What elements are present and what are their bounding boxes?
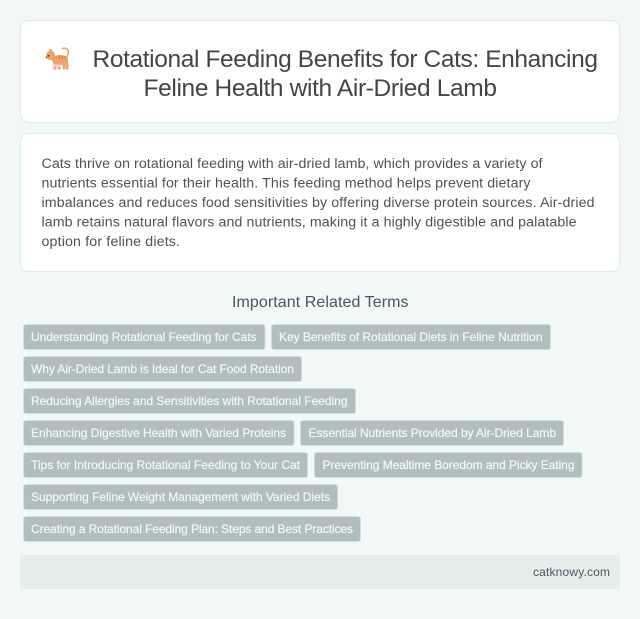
intro text: lamb retains natural flavors and nutrients, making it a highly digestible and palatable: [42, 214, 577, 230]
tag: Reducing Allergies and Sensitivities with Rotational Feeding: [31, 394, 348, 408]
tag list: [24, 324, 582, 542]
tag: Tips for Introducing Rotational Feeding to Your Cat: [31, 458, 301, 472]
tag: [314, 452, 582, 478]
title: Rotational Feeding Benefits for Cats: Enhancing: [92, 46, 598, 73]
tag: Understanding Rotational Feeding for Cats: [31, 330, 256, 344]
tag: [24, 388, 356, 414]
panel: intro paragraph card: [20, 134, 620, 272]
intro text: Cats thrive on rotational feeding with air-dried lamb, which provides a variety of: [42, 156, 543, 172]
tag: [24, 356, 302, 382]
tag: [24, 420, 294, 446]
tag: [24, 324, 265, 350]
tag: Supporting Feline Weight Management with Varied Diets: [31, 490, 330, 504]
tag: [24, 516, 360, 542]
title: Feline Health with Air-Dried Lamb: [144, 75, 497, 102]
title: [92, 46, 598, 102]
icon: cat: [46, 48, 69, 70]
footer bar: [20, 555, 620, 589]
tag: Why Air-Dried Lamb is Ideal for Cat Food Rotation: [31, 362, 294, 376]
tag: Essential Nutrients Provided by Air-Dried Lamb: [308, 426, 556, 440]
tag: [300, 420, 564, 446]
intro text: [42, 156, 594, 250]
intro text: imbalances and reduces food sensitivities by offering diverse protein sources. Air-dried: [42, 195, 594, 211]
intro text: option for feline diets.: [42, 234, 180, 250]
panel: title card: [20, 20, 620, 122]
tag: Key Benefits of Rotational Diets in Feline Nutrition: [279, 330, 542, 344]
tag: Enhancing Digestive Health with Varied Proteins: [31, 426, 286, 440]
tag: [24, 452, 308, 478]
tag: [24, 484, 338, 510]
tag: Creating a Rotational Feeding Plan: Steps and Best Practices: [31, 522, 353, 536]
heading: important related terms: Important Related Terms: [232, 294, 408, 311]
footer source: catknowy.com: [533, 565, 610, 579]
intro text: nutrients essential for their health. This feeding method helps prevent dietary: [42, 176, 531, 192]
tag: Preventing Mealtime Boredom and Picky Eating: [322, 458, 574, 472]
tag: [272, 324, 550, 350]
